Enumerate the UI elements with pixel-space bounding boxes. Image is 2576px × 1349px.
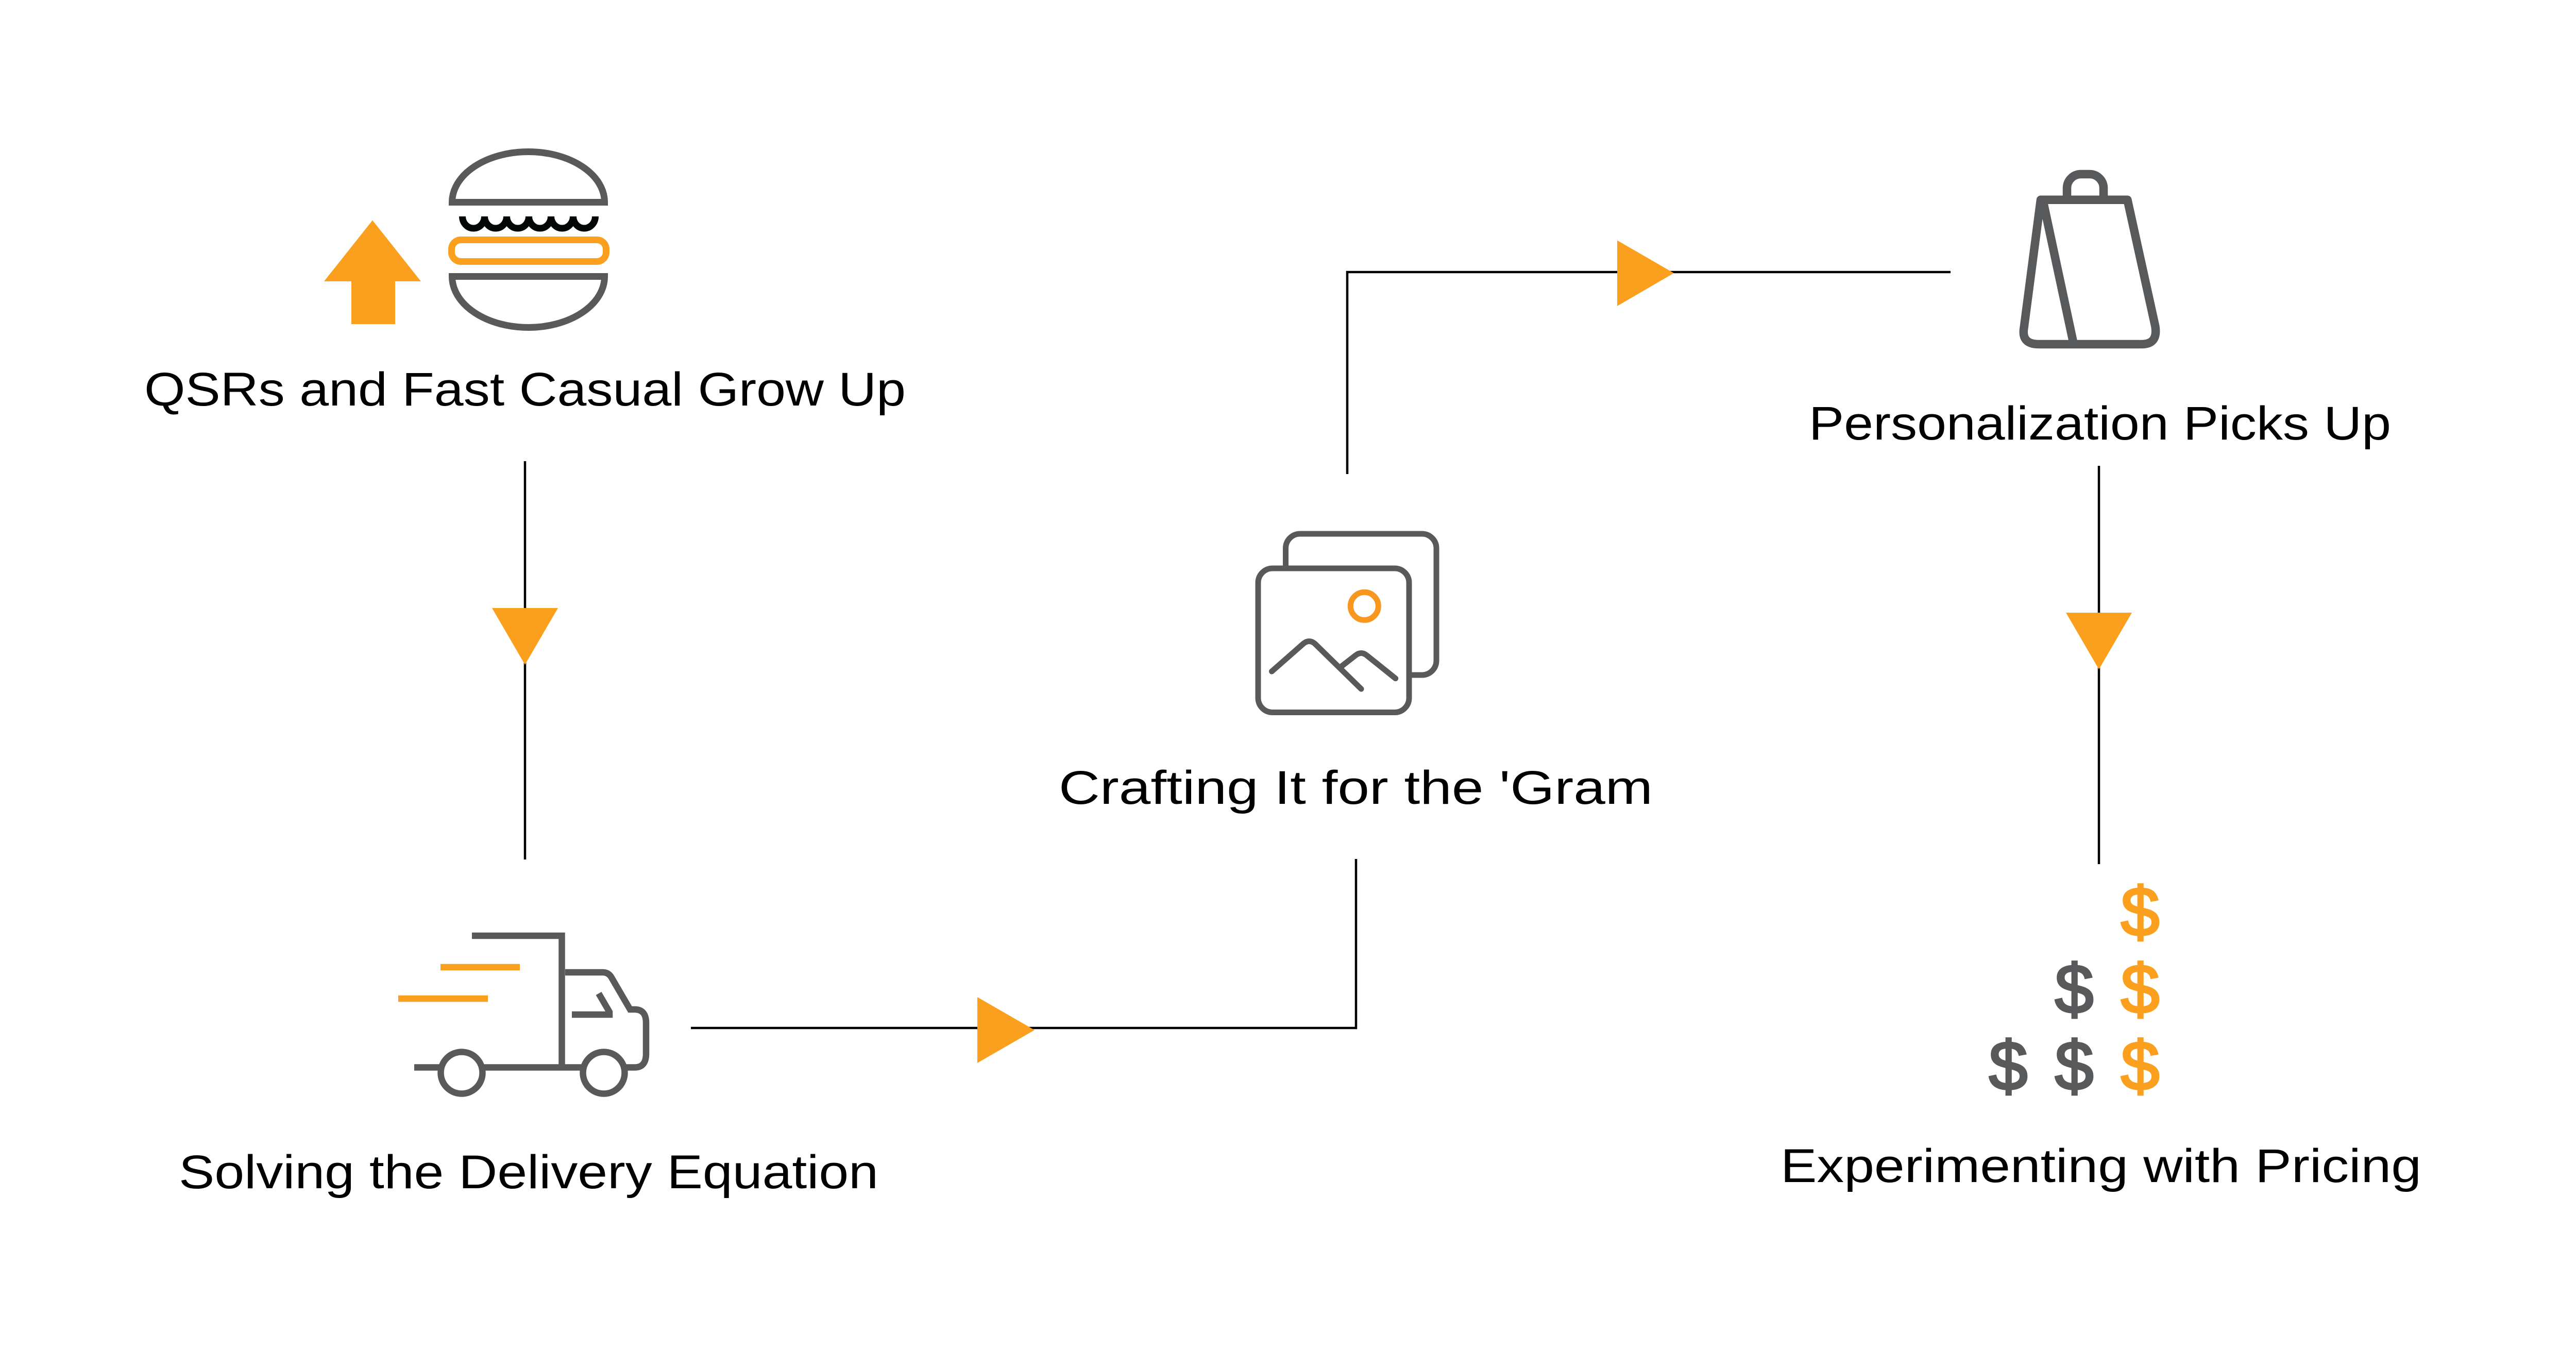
arrow connector: Crafting to Personalization <box>1347 240 1951 474</box>
arrow connector: Personalization to Pricing <box>2066 466 2132 864</box>
icon: dollar signs: $ <box>2121 873 2160 951</box>
label: Crafting It for the 'Gram: Crafting It for the 'Gram <box>1059 762 1653 814</box>
label: Personalization Picks Up: Personalization Picks Up <box>1809 397 2391 450</box>
icon: dollar signs: $ <box>2121 1027 2160 1105</box>
label: Experimenting with Pricing: Experimenting with Pricing <box>1781 1140 2421 1192</box>
arrow connector: QSRs to Delivery <box>492 461 558 859</box>
icon: dollar signs: $ <box>1989 1027 2028 1105</box>
label: QSRs and Fast Casual Grow Up: QSRs and Fast Casual Grow Up <box>144 363 906 416</box>
icon: dollar signs: $ <box>2121 950 2160 1028</box>
icon: stacked photos <box>1258 534 1436 712</box>
icon: burger <box>451 151 606 328</box>
icon: dollar signs <box>1989 873 2160 1105</box>
label: Solving the Delivery Equation: Solving the Delivery Equation <box>179 1146 878 1199</box>
arrow connector: Delivery to Crafting <box>691 859 1356 1063</box>
icon: delivery truck <box>398 936 646 1093</box>
icon: shopping bag <box>2024 174 2156 344</box>
icon: dollar signs: $ <box>2055 1027 2094 1105</box>
icon: dollar signs: $ <box>2055 950 2094 1028</box>
icon: orange up arrow <box>324 221 421 324</box>
